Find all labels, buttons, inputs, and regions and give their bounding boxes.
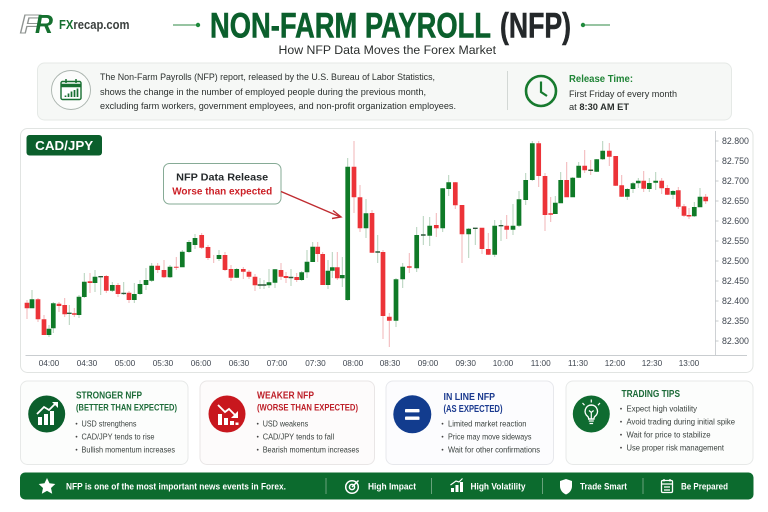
chart badge: CAD/JPY [26, 135, 102, 156]
price axis: 82.750 [722, 156, 749, 166]
callout: NFP data release [164, 164, 281, 204]
logo: FXrecap.com: FXrecap.com [59, 18, 130, 32]
price axis [26, 131, 749, 356]
price axis: 82.350 [722, 316, 749, 326]
text: stronger NFP: Bullish momentum increases [82, 444, 176, 454]
text: in line NFP: Wait for other confirmations [448, 444, 541, 454]
candlesticks [27, 141, 706, 347]
icon: shield [560, 479, 572, 494]
subtitle: How NFP Data Moves the Forex Market [278, 43, 497, 57]
icon: rising bars [28, 396, 65, 432]
icon: clock [526, 76, 556, 106]
text: weaker NFP: (WORSE THAN EXPECTED) [257, 402, 358, 414]
text block: description: shows the change in the number of employed people during the previous month, [100, 87, 426, 98]
logo: FXrecap.com: R [35, 9, 53, 39]
text: trading tips: TRADING TIPS [622, 389, 680, 400]
text block: release time: First Friday of every month [569, 89, 677, 100]
panel: trading tips [566, 381, 753, 464]
text: stronger NFP: (BETTER THAN EXPECTED) [76, 402, 177, 414]
icon: calendar [662, 479, 672, 492]
chart badge: CAD/JPY: CAD/JPY [35, 138, 94, 153]
time axis: 12:30 [642, 359, 663, 368]
logo: FXrecap.com [20, 9, 130, 39]
price axis: 82.600 [722, 216, 749, 226]
text: in line NFP [442, 392, 541, 454]
text: stronger NFP [76, 390, 177, 454]
time axis: 08:00 [343, 359, 364, 368]
time axis: 13:00 [679, 359, 700, 368]
text: weaker NFP: CAD/JPY tends to fall [263, 432, 334, 442]
price axis: 82.500 [722, 256, 749, 266]
text: trading tips: Avoid trading during initial spike [626, 416, 735, 426]
time axis: 09:30 [455, 359, 476, 368]
text block: description: The Non-Farm Payrolls (NFP) report, released by the U.S. Bureau of Labor Statistics, [100, 72, 435, 83]
label: high volatility: High Volatility [470, 482, 526, 492]
price axis: 82.550 [722, 236, 749, 246]
text: in line NFP: (AS EXPECTED) [444, 404, 502, 415]
title: Non-Farm Payroll (NFP): (NFP) [500, 6, 571, 46]
time axis: 05:30 [153, 359, 174, 368]
icon: calendar chart [52, 70, 90, 110]
icon: target [346, 480, 358, 493]
time axis [39, 359, 700, 368]
time axis: 04:00 [39, 359, 60, 368]
price axis: 82.450 [722, 276, 749, 286]
text: weaker NFP [257, 390, 360, 454]
text block: description: excluding farm workers, government employees, and non-profit organization employees. [100, 101, 456, 112]
icon: falling bars [208, 396, 246, 432]
text: weaker NFP: Bearish momentum increases [263, 444, 360, 454]
text: in line NFP: Price may move sideways [448, 432, 532, 442]
text: trading tips: Wait for price to stabilize [626, 430, 711, 440]
icon: star [39, 478, 55, 494]
text: in line NFP: IN LINE NFP [444, 392, 495, 403]
label: high impact: High Impact [368, 482, 416, 492]
panel: candlestick chart [20, 128, 753, 372]
time axis: 06:30 [229, 359, 250, 368]
label: trade smart: Trade Smart [580, 482, 627, 492]
price axis: 82.400 [722, 296, 749, 306]
text: stronger NFP: CAD/JPY tends to rise [82, 432, 155, 442]
text block: description [100, 72, 456, 112]
footer bar [20, 472, 754, 500]
icon: light bulb [573, 396, 610, 432]
text: trading tips: Use proper risk management [626, 442, 725, 452]
time axis: 12:00 [605, 359, 626, 368]
price axis: 82.300 [722, 336, 749, 346]
text: in line NFP: Limited market reaction [448, 418, 527, 428]
panel: in line NFP [386, 381, 554, 464]
title: Non-Farm Payroll (NFP): NON-FARM PAYROLL [210, 6, 491, 46]
icon: equals sign [393, 395, 431, 433]
time axis: 06:00 [191, 359, 212, 368]
time axis: 05:00 [115, 359, 136, 368]
logo: FXrecap.com: F [20, 9, 41, 39]
text: trading tips [620, 389, 735, 452]
time axis: 11:00 [531, 359, 551, 368]
time axis: 07:00 [267, 359, 288, 368]
price axis: 82.800 [722, 136, 749, 146]
text block: release time [569, 74, 677, 113]
text block: release time: at 8:30 AM ET [569, 102, 629, 113]
price axis: 82.650 [722, 196, 749, 206]
text: weaker NFP: WEAKER NFP [257, 390, 314, 402]
text: weaker NFP: USD weakens [263, 418, 309, 428]
time axis: 09:00 [418, 359, 439, 368]
panel: stronger NFP [20, 381, 188, 464]
panel: weaker NFP [200, 381, 374, 464]
text: stronger NFP: STRONGER NFP [76, 390, 142, 402]
time axis: 10:00 [493, 359, 514, 368]
callout: NFP data release: Worse than expected [172, 186, 272, 198]
time axis: 04:30 [77, 359, 98, 368]
time axis: 08:30 [380, 359, 401, 368]
callout: NFP data release: NFP Data Release [176, 172, 268, 184]
label: be prepared: Be Prepared [681, 482, 728, 492]
text block: release time: Release Time: [569, 74, 633, 85]
panel: NFP description and release time [38, 63, 732, 120]
text: trading tips: Expect high volatility [626, 404, 698, 414]
icon: volatility bars [450, 478, 463, 492]
time axis: 07:30 [305, 359, 326, 368]
footer message: NFP is one of the most important news events in Forex. [66, 482, 286, 492]
arrow: callout to release candle [281, 192, 341, 218]
text: stronger NFP: USD strengthens [82, 418, 137, 428]
price axis: 82.700 [722, 176, 749, 186]
time axis: 11:30 [568, 359, 588, 368]
